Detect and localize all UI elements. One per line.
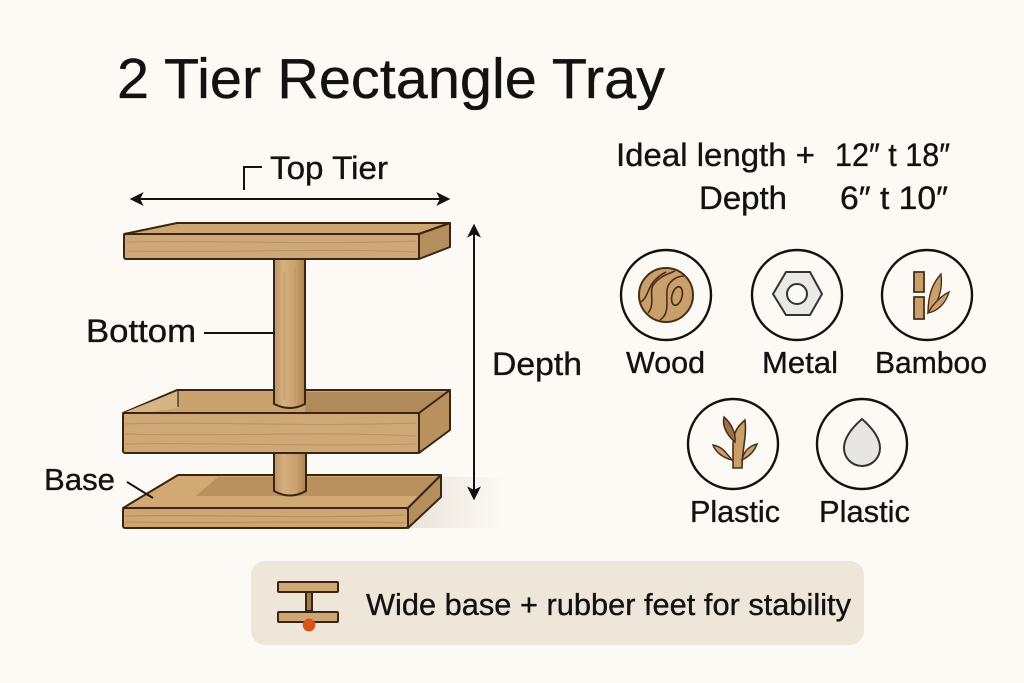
dimensions text: 6″ t 10″ bbox=[840, 180, 948, 216]
tray illustration bbox=[123, 223, 505, 528]
material: metal bbox=[752, 250, 842, 380]
upper post bbox=[274, 259, 305, 408]
dimensions text: Ideal length + bbox=[616, 137, 815, 173]
top tier bbox=[124, 223, 450, 259]
material: bamboo bbox=[875, 250, 987, 380]
callout text: Wide base + rubber feet for stability bbox=[366, 587, 851, 622]
material: wood bbox=[621, 250, 711, 380]
dimensions text: 12″ t 18″ bbox=[835, 137, 950, 173]
material: metal: Metal bbox=[762, 346, 838, 380]
depth dimension: Depth bbox=[492, 346, 582, 382]
base label bbox=[44, 462, 153, 498]
bottom label: Bottom bbox=[86, 313, 196, 349]
top tier dimension bbox=[132, 150, 448, 199]
icon: tray with rubber foot bbox=[278, 582, 338, 632]
title: 2 Tier Rectangle Tray bbox=[117, 47, 665, 111]
dimensions text: Depth bbox=[699, 180, 787, 216]
material: bamboo: Bamboo bbox=[875, 346, 987, 380]
base label: Base bbox=[44, 462, 115, 497]
material: wood: Wood bbox=[626, 346, 705, 380]
material: plastic plant bbox=[688, 399, 780, 529]
callout: stability tip bbox=[251, 561, 864, 645]
top tier dimension: Top Tier bbox=[270, 150, 388, 186]
material: plastic drop bbox=[817, 399, 910, 529]
material: plastic plant: Plastic bbox=[690, 495, 780, 529]
lower post bbox=[274, 453, 306, 496]
material: plastic drop: Plastic bbox=[819, 495, 910, 529]
dimensions text bbox=[616, 137, 950, 216]
middle tray bbox=[123, 390, 450, 453]
base board bbox=[123, 475, 441, 528]
base shadow bbox=[410, 477, 505, 528]
